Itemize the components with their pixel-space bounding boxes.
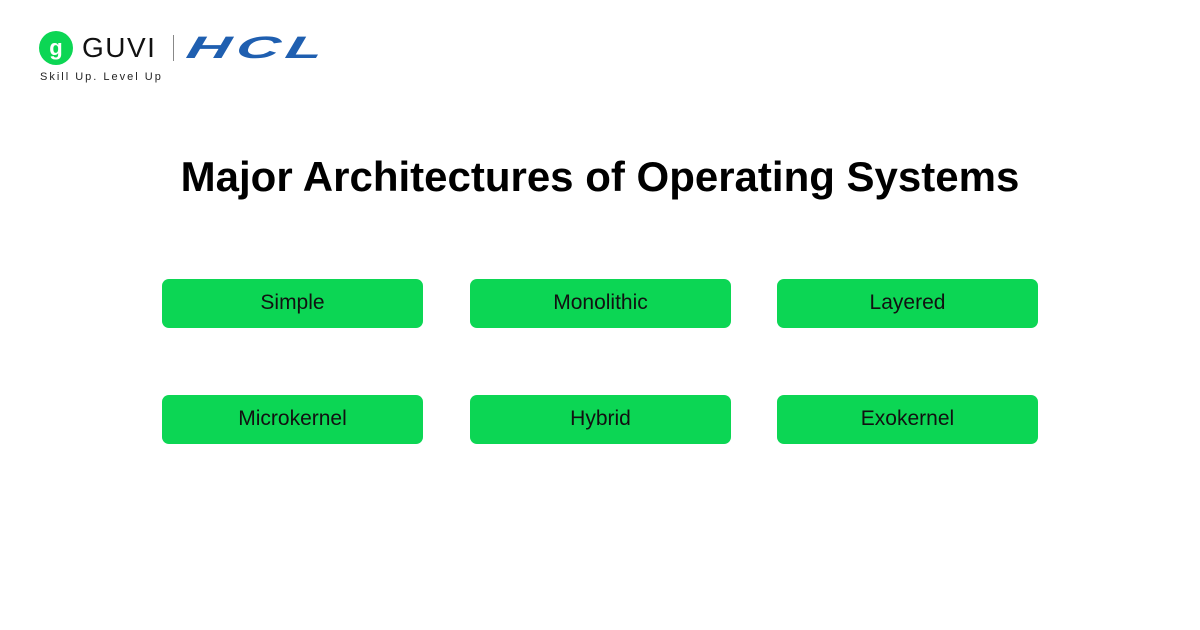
box: Hybrid (470, 395, 731, 444)
box: Microkernel (162, 395, 423, 444)
box: Microkernel: Microkernel (238, 407, 347, 430)
box: Simple: Simple (260, 291, 325, 314)
GUVI text: GUVI (82, 32, 156, 63)
HCL text: HCL (183, 30, 333, 65)
box: Simple (162, 279, 423, 328)
title: Major Architectures of Operating Systems (181, 153, 1019, 200)
box: Layered: Layered (870, 291, 945, 314)
box: Exokernel: Exokernel (861, 407, 954, 430)
box: Hybrid: Hybrid (570, 407, 631, 430)
logo (39, 30, 333, 83)
box: Monolithic (470, 279, 731, 328)
box: Exokernel (777, 395, 1038, 444)
icon: guvi circle: g (49, 35, 63, 60)
tagline: Skill Up. Level Up (40, 71, 163, 83)
box: Layered (777, 279, 1038, 328)
box: Monolithic: Monolithic (553, 291, 648, 314)
icon: guvi circle (39, 31, 73, 65)
